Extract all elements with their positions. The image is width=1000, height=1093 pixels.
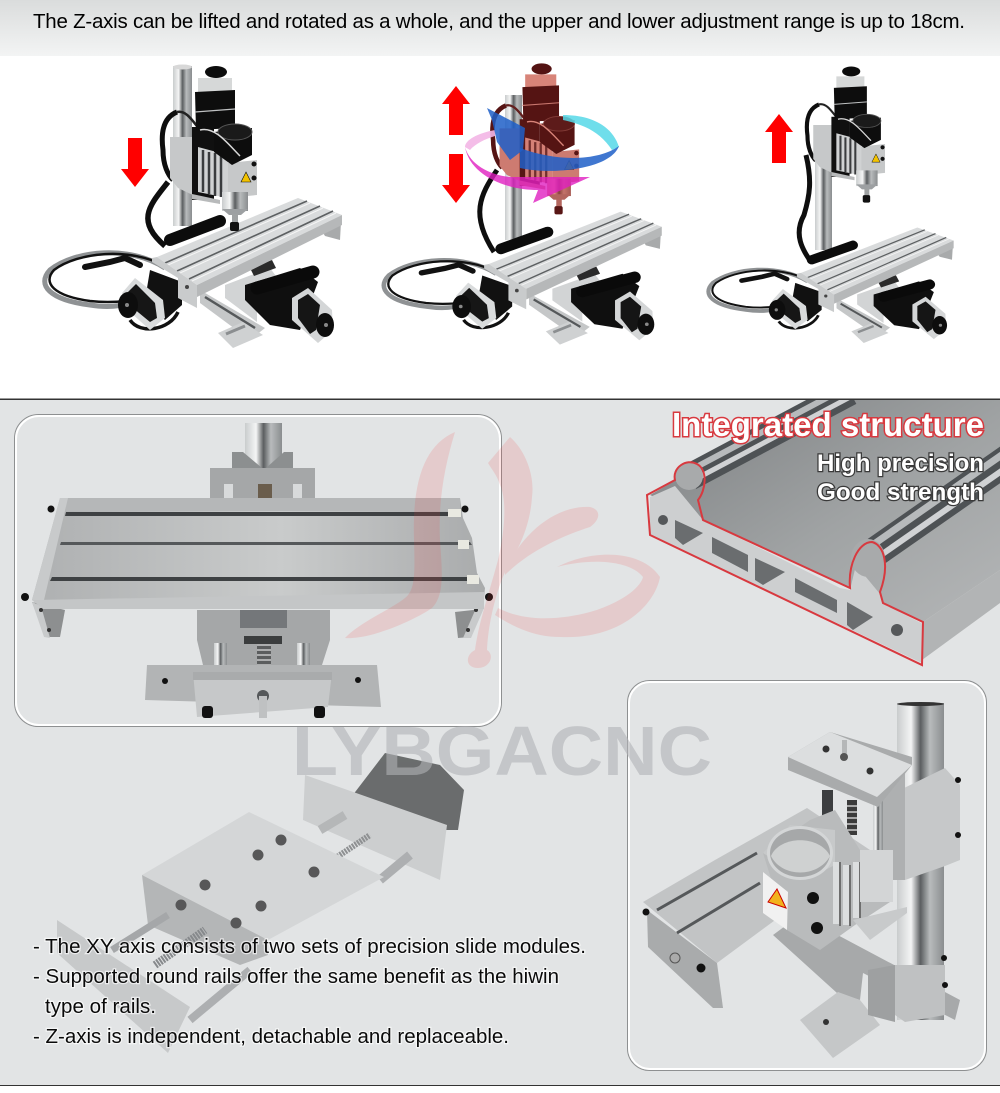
text block: feature bullets (33, 935, 586, 1048)
panel: spindle frame (628, 680, 986, 1070)
arrow: down (121, 138, 149, 187)
panel: integrated structure profile (647, 387, 1000, 665)
watermark text: LYBGACNC (292, 712, 712, 790)
panel: XY table frame (14, 414, 502, 726)
photo: spindle mount (642, 702, 961, 1058)
text: good strength: Good strength (817, 479, 984, 506)
machine 1: head lowered (45, 64, 342, 348)
arrow: up (machine 3) (765, 114, 793, 163)
lower section background (0, 400, 1000, 1086)
photo: XY table (21, 423, 493, 718)
header band (0, 0, 1000, 56)
watermark logo (345, 432, 660, 668)
text block: feature bullets: type of rails. (45, 995, 156, 1018)
text block: feature bullets: - Supported round rails offer the same benefit as the hiwin (33, 965, 559, 988)
machine 3: head raised (708, 66, 954, 343)
photo: XY slide module (57, 753, 464, 1053)
arrow: up (machine 2) (442, 86, 470, 135)
text block: feature bullets: - The XY axis consists of two sets of precision slide modules. (33, 935, 586, 958)
text: high precision: High precision (817, 450, 984, 477)
heading: integrated structure: Integrated structure (672, 406, 984, 443)
arrow: down (machine 2) (442, 154, 470, 203)
rotation ring arrows (465, 108, 619, 203)
heading: Z-axis description: The Z-axis can be lifted and rotated as a whole, and the upper and lower adjustment range is up to 18cm. (33, 10, 965, 33)
machine 2: head rotating (384, 63, 662, 345)
text block: feature bullets: - Z-axis is independent, detachable and replaceable. (33, 1025, 509, 1048)
